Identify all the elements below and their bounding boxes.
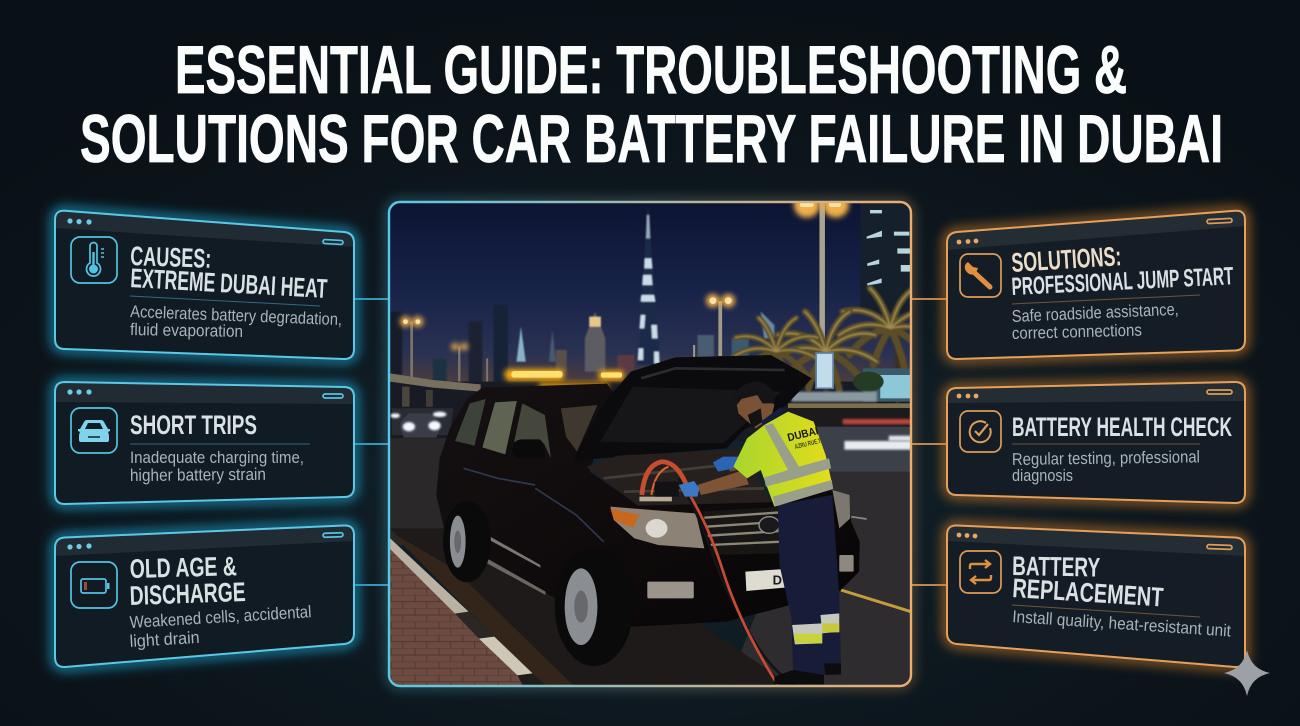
heading: BATTERY	[1012, 551, 1100, 583]
night sky	[385, 195, 918, 382]
body text: fluid evaporation	[130, 320, 243, 341]
overpass	[390, 373, 481, 407]
vest lettering	[787, 426, 820, 449]
connector: health check to photo	[911, 443, 947, 445]
icon: thermometer	[71, 237, 117, 283]
rear wheel	[443, 501, 491, 582]
body text	[130, 302, 342, 341]
panel: solutions, professional jump start	[947, 211, 1245, 359]
body text: Weakened cells, accidental	[129, 602, 312, 632]
icon: wrench	[960, 254, 1001, 297]
panel: battery health check	[947, 382, 1245, 503]
heading: EXTREME DUBAI HEAT	[130, 263, 328, 304]
body text	[1011, 300, 1179, 343]
skyline	[390, 203, 774, 385]
far lane and motion streaks	[788, 403, 914, 473]
heading: SHORT TRIPS	[130, 410, 257, 440]
running board	[487, 559, 546, 595]
connector: old age to photo	[354, 584, 389, 586]
panel: old age and discharge	[55, 525, 354, 667]
sparkle watermark	[1224, 650, 1270, 696]
connector: replacement to photo	[911, 584, 947, 586]
body text: correct connections	[1012, 321, 1142, 343]
head	[737, 391, 774, 428]
body text	[1012, 447, 1200, 485]
right-hand tower	[860, 203, 912, 313]
hi-vis vest	[733, 412, 833, 507]
photo: technician jump-starting a black SUV at night in Dubai	[385, 192, 942, 688]
headlight	[610, 507, 704, 548]
heading: SOLUTIONS:	[1010, 241, 1122, 278]
jumper cables	[639, 462, 795, 685]
heading: REPLACEMENT	[1012, 573, 1165, 612]
panel: short trips	[55, 382, 354, 504]
heading	[130, 241, 328, 304]
body reflections	[464, 468, 604, 542]
Burj Khalifa tower	[637, 203, 660, 365]
heading: CAUSES:	[130, 241, 212, 274]
body text: Safe roadside assistance,	[1011, 300, 1179, 326]
trousers	[778, 495, 841, 675]
icon: check mark	[960, 411, 1001, 452]
heading: DISCHARGE	[129, 577, 246, 611]
body text: higher battery strain	[130, 465, 266, 485]
right headlight	[832, 490, 850, 528]
icon: car	[71, 408, 117, 453]
heading	[1010, 241, 1234, 301]
body text: Regular testing, professional	[1012, 447, 1200, 469]
engine bay	[587, 449, 771, 506]
icon: low battery	[71, 562, 117, 608]
heading	[129, 551, 246, 611]
connector: jump start to photo	[911, 298, 947, 300]
car body	[436, 384, 860, 627]
heading: OLD AGE &	[129, 551, 237, 584]
road surface	[385, 438, 913, 688]
frame glow	[389, 202, 911, 686]
fog light	[647, 582, 694, 598]
connector: short trips to photo	[354, 443, 389, 445]
roof beacon lights	[505, 369, 624, 390]
body text: Inadequate charging time,	[130, 448, 304, 467]
icon: swap arrows	[960, 551, 1001, 593]
arms and gloves	[698, 470, 749, 495]
vest lettering: DUBAI	[786, 425, 820, 444]
vest lettering: AZRU RUE.T	[794, 438, 822, 451]
palm trees	[730, 284, 910, 404]
number plate: D	[773, 572, 782, 587]
panel: battery replacement	[947, 525, 1245, 667]
traffic behind	[390, 408, 453, 438]
title	[80, 32, 1223, 177]
front wheel	[554, 568, 631, 666]
heading	[1012, 551, 1165, 612]
street lights	[400, 192, 849, 383]
billboard	[816, 353, 833, 388]
technician	[679, 382, 841, 684]
connector: causes to photo	[354, 298, 389, 300]
body text: light drain	[129, 628, 200, 651]
body text	[129, 602, 312, 651]
far background ground	[385, 382, 918, 442]
side windows	[455, 399, 597, 458]
photo frame	[389, 202, 911, 686]
sidewalk	[385, 538, 547, 687]
SUV	[436, 355, 860, 666]
body text: diagnosis	[1012, 466, 1073, 485]
number plate	[745, 569, 785, 591]
grille	[703, 507, 783, 555]
open hood	[594, 355, 812, 459]
lit storefronts	[791, 368, 911, 402]
body text: Accelerates battery degradation,	[130, 302, 342, 329]
panel: causes, extreme Dubai heat	[55, 211, 354, 359]
body text	[130, 448, 304, 485]
body text: Install quality, heat-resistant unit	[1012, 607, 1232, 641]
